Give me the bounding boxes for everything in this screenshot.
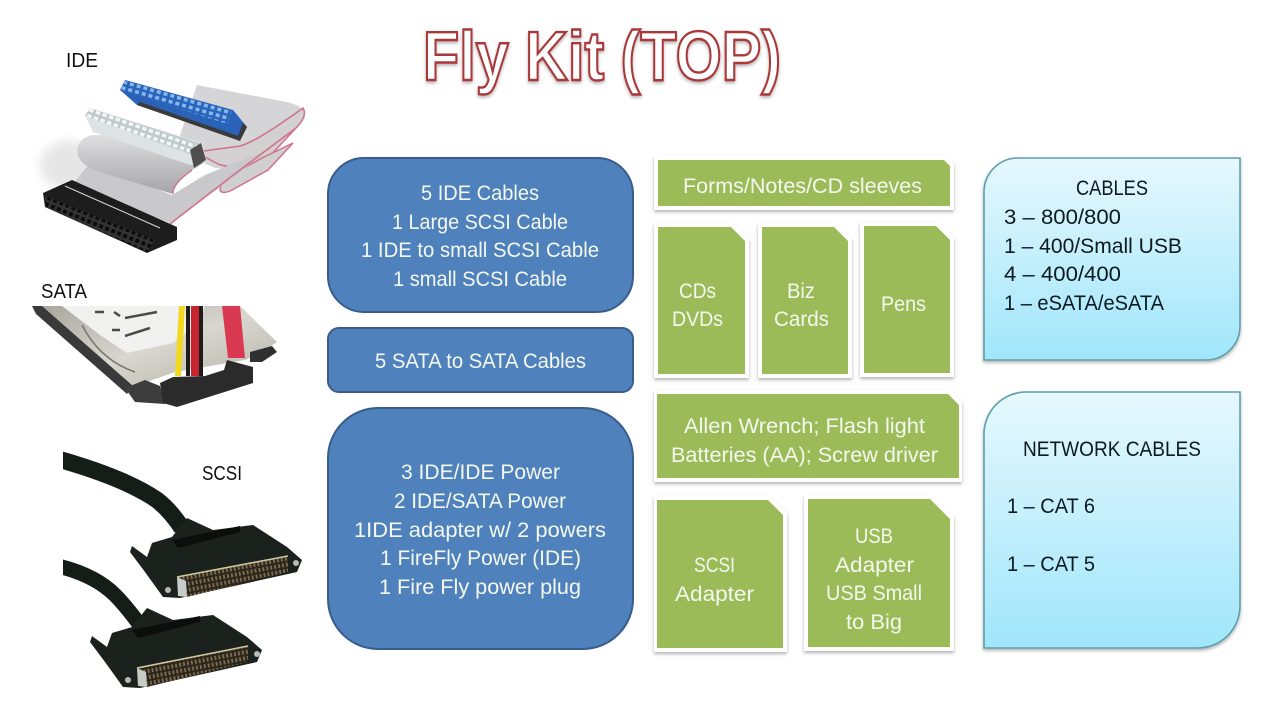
panel: USB adapter: USB Small — [826, 582, 922, 605]
panel: cables: 1 – 400/Small USB — [1004, 235, 1182, 258]
panel: IDE and SCSI cables — [328, 158, 633, 312]
panel: CDs and DVDs — [654, 223, 749, 378]
panel: forms — [654, 156, 954, 210]
panel: CDs and DVDs: DVDs — [672, 308, 723, 331]
panel: tools: Allen Wrench; Flash light — [684, 415, 925, 438]
panel: power cables: 2 IDE/SATA Power — [394, 490, 566, 513]
rolled ribbon — [77, 135, 204, 194]
panel: network cables: NETWORK CABLES — [1023, 438, 1201, 461]
image: SCSI cables — [58, 459, 302, 688]
panel: SATA cables — [328, 328, 633, 392]
image: SATA hard drive with cable — [32, 306, 277, 407]
image: IDE ribbon cable — [40, 80, 304, 253]
panel: USB adapter: USB — [855, 525, 893, 548]
panel: network cables: 1 – CAT 5 — [1007, 553, 1095, 576]
white connector — [85, 108, 207, 168]
panel: forms: Forms/Notes/CD sleeves — [683, 175, 922, 198]
panel: network cables — [984, 392, 1240, 648]
title: Fly Kit (TOP) — [423, 17, 781, 95]
panel: IDE and SCSI cables: 1 IDE to small SCSI Cable — [361, 239, 599, 262]
panel: pens: Pens — [881, 293, 926, 316]
front ribbon — [72, 130, 293, 223]
panel: cables: CABLES — [1076, 177, 1148, 200]
panel: power cables — [328, 408, 633, 649]
lower SCSI connector — [90, 608, 262, 688]
panel: IDE and SCSI cables: 5 IDE Cables — [421, 182, 539, 205]
black connector — [43, 180, 177, 253]
blue connector — [120, 80, 247, 141]
panel: cables: 1 – eSATA/eSATA — [1004, 292, 1164, 315]
panel: business cards: Biz — [787, 280, 815, 303]
panel: USB adapter: to Big — [846, 611, 902, 634]
panel: SCSI adapter: Adapter — [675, 583, 754, 606]
panel: tools: Batteries (AA); Screw driver — [671, 444, 938, 467]
connector wires — [160, 306, 253, 407]
panel: CDs and DVDs: CDs — [679, 280, 716, 303]
panel: SCSI adapter — [654, 496, 787, 652]
label: SATA: SATA — [41, 281, 88, 303]
rear ribbon fold — [175, 85, 303, 169]
upper SCSI connector — [130, 518, 302, 598]
panel: cables: 4 – 400/400 — [1004, 263, 1121, 286]
panel: business cards: Cards — [774, 308, 829, 331]
panel: USB adapter: Adapter — [835, 554, 914, 577]
label: IDE: IDE — [66, 50, 98, 72]
panel: power cables: 1 Fire Fly power plug — [379, 576, 581, 599]
panel: tools — [654, 390, 962, 482]
panel: cables — [984, 158, 1240, 360]
panel: pens — [860, 222, 954, 377]
panel: IDE and SCSI cables: 1 Large SCSI Cable — [392, 211, 568, 234]
panel: USB adapter — [804, 495, 954, 651]
label: SCSI: SCSI — [202, 463, 242, 485]
panel: SCSI adapter: SCSI — [694, 554, 735, 577]
panel: power cables: 3 IDE/IDE Power — [401, 461, 560, 484]
panel: SATA cables: 5 SATA to SATA Cables — [375, 350, 586, 373]
panel: power cables: 1IDE adapter w/ 2 powers — [354, 519, 606, 542]
panel: network cables: 1 – CAT 6 — [1007, 495, 1095, 518]
panel: business cards — [758, 223, 852, 378]
panel: IDE and SCSI cables: 1 small SCSI Cable — [393, 268, 567, 291]
panel: power cables: 1 FireFly Power (IDE) — [380, 547, 581, 570]
panel: cables: 3 – 800/800 — [1004, 206, 1121, 229]
